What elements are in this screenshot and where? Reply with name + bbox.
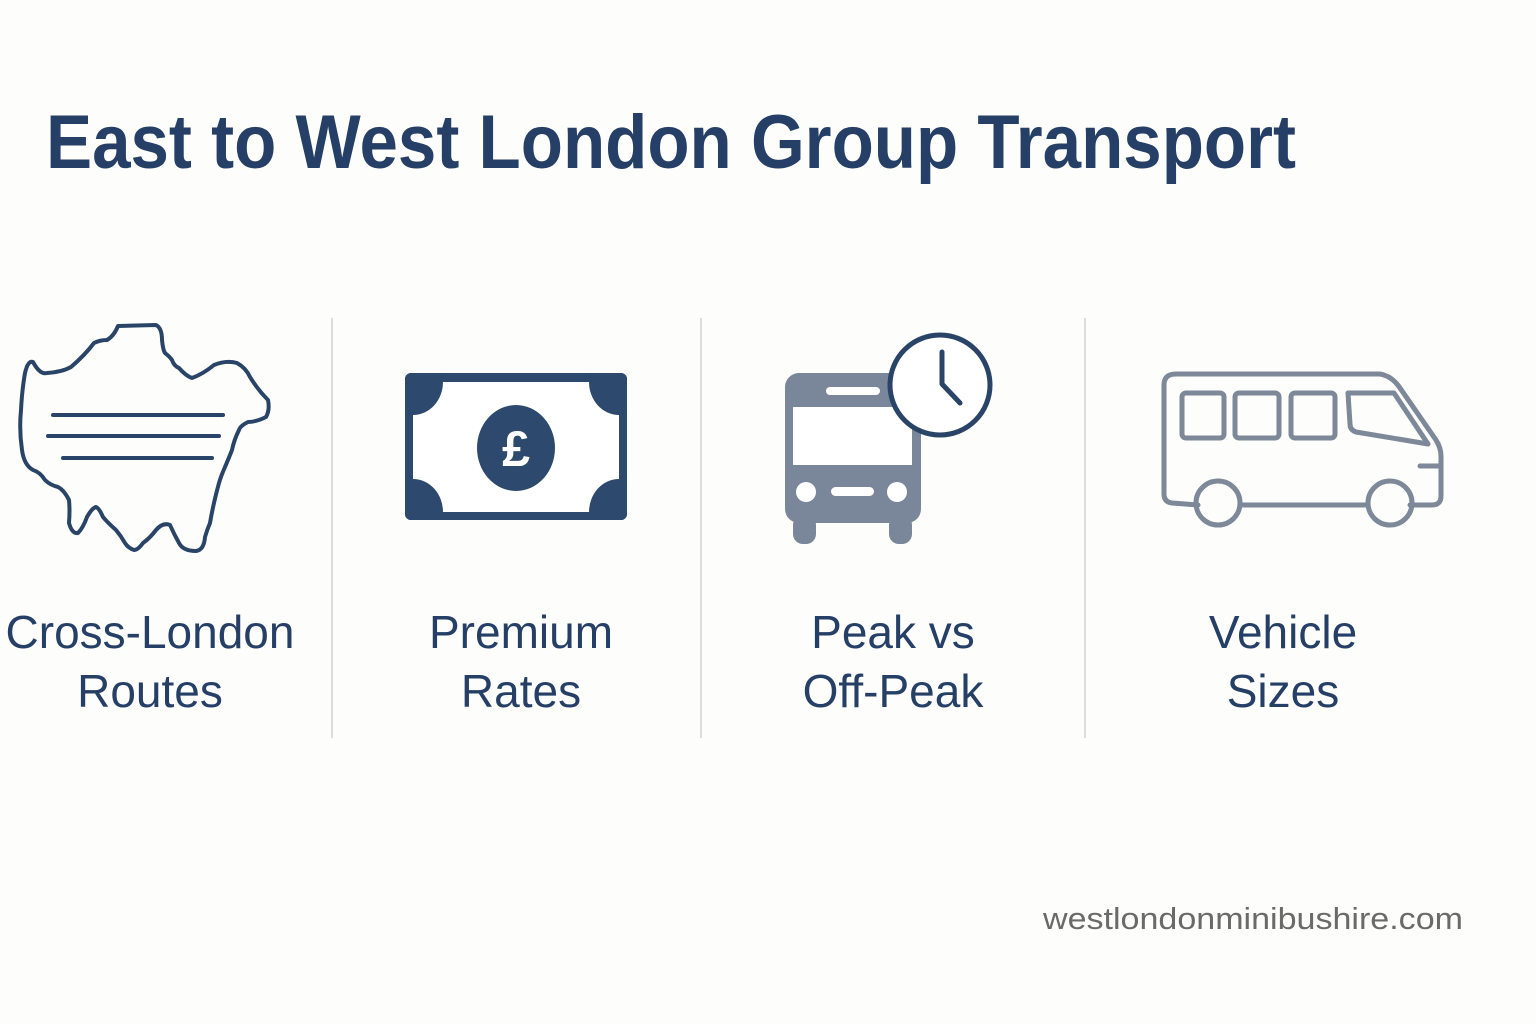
footer: website: westlondonminibushire.com <box>1042 901 1463 936</box>
icon: minibus <box>1164 374 1441 525</box>
label: Vehicle Sizes: Sizes <box>1227 665 1339 717</box>
label: Premium Rates <box>429 606 613 717</box>
label: Peak vs Off-Peak: Peak vs <box>811 606 975 658</box>
label: Peak vs Off-Peak <box>803 606 984 717</box>
label: Premium Rates: Rates <box>461 665 581 717</box>
label: Cross-London Routes <box>6 606 294 717</box>
label: Premium Rates: Premium <box>429 606 613 658</box>
label: Vehicle Sizes: Vehicle <box>1209 606 1357 658</box>
icon: London map <box>20 325 269 551</box>
title: East to West London Group Transport <box>46 100 1296 185</box>
icon: banknote <box>405 373 627 520</box>
label: Cross-London Routes: Cross-London <box>6 606 294 658</box>
icon: bus with clock <box>785 335 990 544</box>
label: Cross-London Routes: Routes <box>77 665 223 717</box>
label: Vehicle Sizes <box>1209 606 1357 717</box>
icon: banknote: £ <box>502 421 530 477</box>
label: Peak vs Off-Peak: Off-Peak <box>803 665 984 717</box>
